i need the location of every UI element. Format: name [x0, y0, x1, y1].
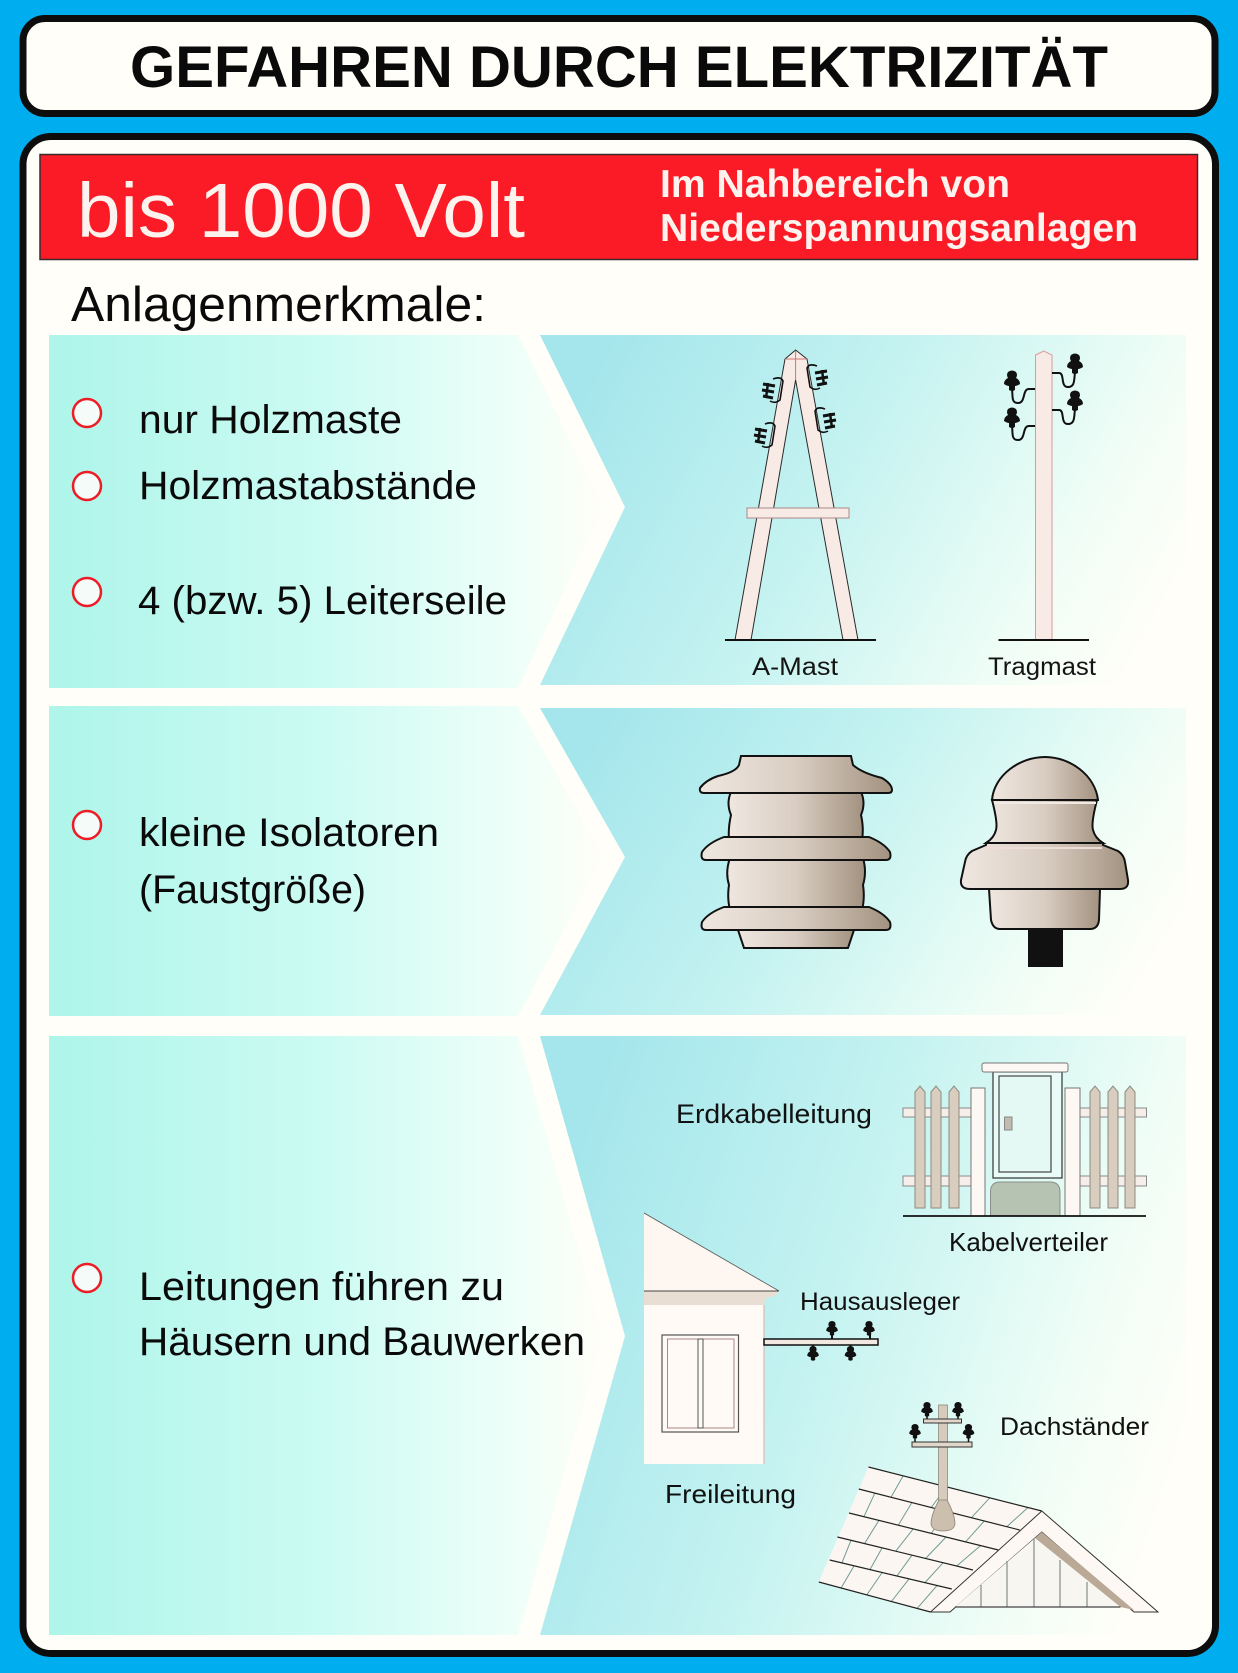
label: Dachständer: Dachständer	[1000, 1413, 1149, 1441]
arrow panel 1 text: Holzmastabstände	[139, 464, 477, 508]
arrow panel 2 text: kleine Isolatoren	[139, 811, 439, 855]
cable distribution box with fence	[903, 1063, 1146, 1216]
image background panel 3	[540, 1036, 1186, 1635]
red voltage header: Im Nahbereich von	[660, 163, 1010, 206]
red voltage header	[40, 154, 1198, 260]
A-Mast drawing	[725, 350, 876, 681]
insulator: left triple-skirt	[700, 756, 892, 948]
label: Kabelverteiler: Kabelverteiler	[949, 1227, 1108, 1257]
label: Erdkabelleitung: Erdkabelleitung	[676, 1099, 872, 1129]
panel 3: connections to buildings	[49, 1036, 1186, 1635]
label: Hausausleger: Hausausleger	[800, 1288, 960, 1316]
arrow panel 2 text	[49, 706, 603, 1016]
image background panel 2	[540, 708, 1186, 1015]
arrow panel 2 text: (Faustgröße)	[139, 868, 366, 912]
title banner	[23, 18, 1215, 114]
panel 2: insulators	[49, 706, 1186, 1016]
arrow panel 1 text	[49, 335, 603, 688]
label: Freileitung: Freileitung	[665, 1479, 796, 1509]
roof with roof stand	[819, 1402, 1158, 1612]
Tragmast drawing: Tragmast	[988, 653, 1096, 681]
insulator: right dome	[961, 757, 1128, 967]
panel 1: masts	[49, 335, 1186, 688]
Tragmast drawing	[988, 351, 1096, 681]
arrow panel 3 text	[49, 1036, 603, 1635]
title banner: GEFAHREN DURCH ELEKTRIZITÄT	[130, 35, 1108, 100]
heading: Anlagenmerkmale: Anlagenmerkmale:	[71, 277, 486, 332]
arrow panel 1 text: nur Holzmaste	[139, 398, 402, 442]
red voltage header: bis 1000 Volt	[77, 168, 525, 254]
red voltage header: Niederspannungsanlagen	[660, 207, 1138, 250]
image background panel 1	[540, 335, 1186, 685]
A-Mast drawing: A-Mast	[752, 653, 838, 681]
arrow panel 1 text: 4 (bzw. 5) Leiterseile	[138, 579, 507, 623]
arrow panel 3 text: Häusern und Bauwerken	[139, 1320, 585, 1364]
arrow panel 3 text: Leitungen führen zu	[139, 1265, 504, 1309]
house with wall bracket	[644, 1213, 878, 1464]
